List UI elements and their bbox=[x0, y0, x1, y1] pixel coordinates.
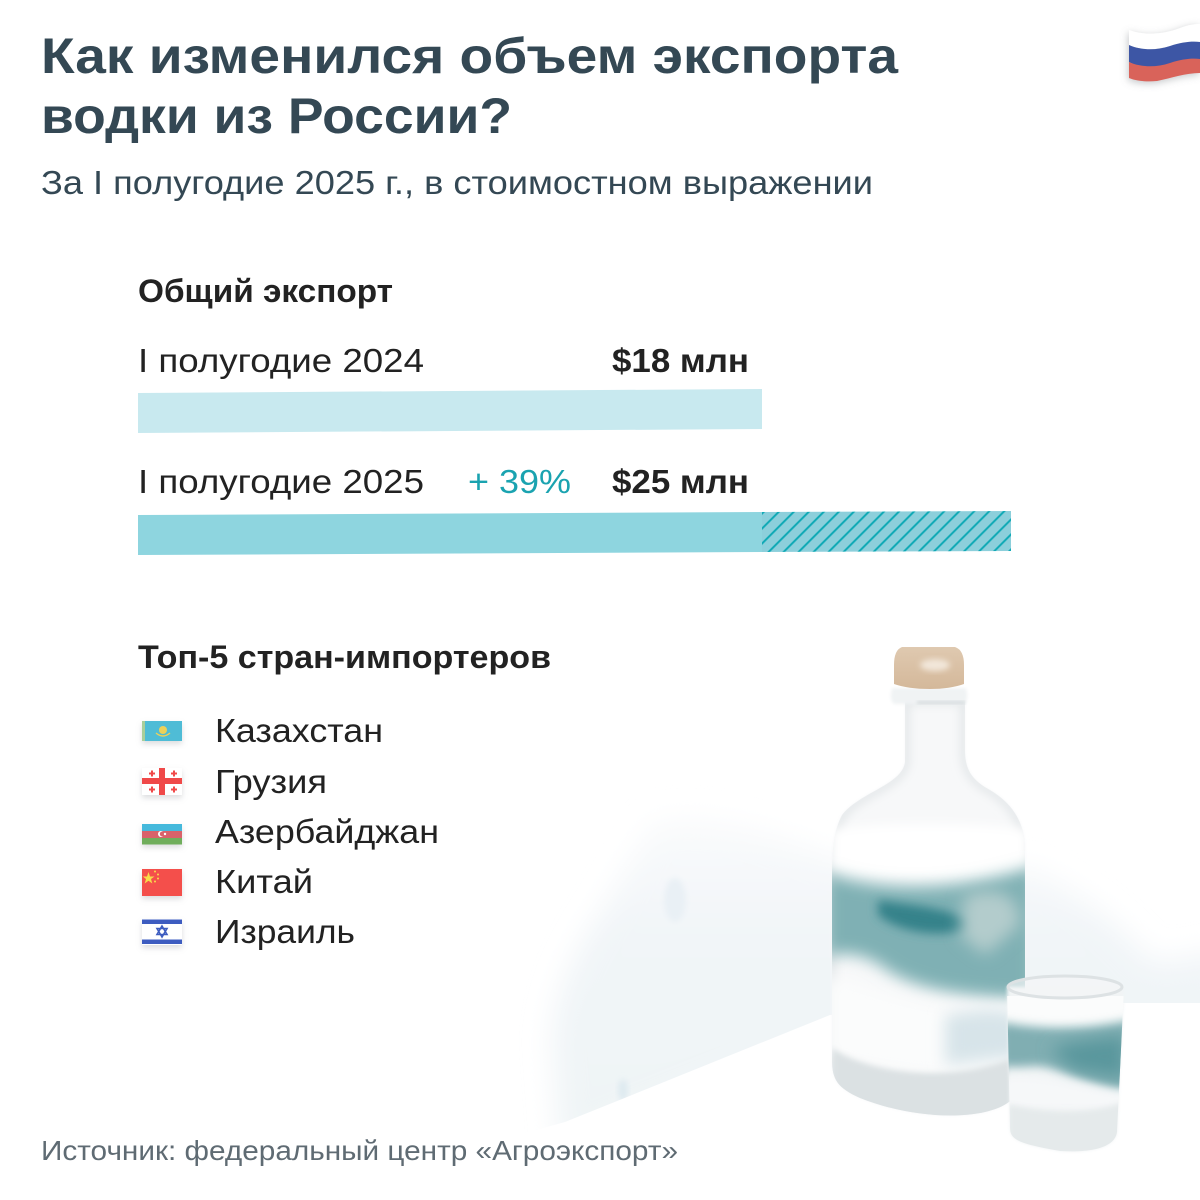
heading: total export: Общий экспорт bbox=[138, 273, 393, 309]
glass rim bbox=[1008, 976, 1122, 998]
label: Azerbaijan: Азербайджан bbox=[215, 813, 439, 850]
label: China: Китай bbox=[215, 863, 313, 900]
bottle neck rim bbox=[891, 688, 967, 704]
bar: 2025 bbox=[138, 511, 1011, 555]
growth: plus 39 percent: + 39% bbox=[468, 463, 571, 500]
cork bbox=[894, 647, 964, 689]
icon: flag of China bbox=[142, 869, 182, 896]
icon: flag of Azerbaijan bbox=[142, 824, 182, 844]
icon: russian flag bbox=[1129, 24, 1200, 81]
label: first half 2025: I полугодие 2025 bbox=[138, 463, 424, 500]
label: Israel: Израиль bbox=[215, 913, 355, 950]
icon: flag of Kazakhstan bbox=[142, 721, 182, 741]
heading: top 5 importers: Топ-5 стран-импортеров bbox=[138, 639, 551, 675]
value: 18 million: $18 млн bbox=[612, 342, 749, 379]
highlight on cork bbox=[920, 659, 950, 671]
watercolor background wash bbox=[554, 857, 1200, 1123]
bar: 2024 bbox=[138, 389, 762, 433]
icon: flag of Georgia bbox=[142, 768, 182, 795]
icon: flag of Israel bbox=[142, 919, 182, 945]
bar increase hatch bbox=[762, 511, 1011, 552]
label: Georgia: Грузия bbox=[215, 763, 327, 800]
illustration: glass bbox=[1000, 976, 1130, 1155]
bottle liquid bbox=[832, 704, 1025, 1116]
value: 25 million: $25 млн bbox=[612, 463, 749, 500]
illustration: bottle bbox=[825, 647, 1035, 1125]
title: Как изменился объем экспорта bbox=[41, 28, 899, 84]
label: first half 2024: I полугодие 2024 bbox=[138, 342, 424, 379]
bottle body bbox=[832, 700, 1025, 1116]
source note: Источник: федеральный центр «Агроэкспорт» bbox=[41, 1135, 678, 1166]
subtitle: За I полугодие 2025 г., в стоимостном выражении bbox=[41, 164, 873, 201]
title: водки из России? bbox=[41, 88, 512, 144]
title bbox=[41, 28, 899, 144]
label: Kazakhstan: Казахстан bbox=[215, 712, 383, 749]
